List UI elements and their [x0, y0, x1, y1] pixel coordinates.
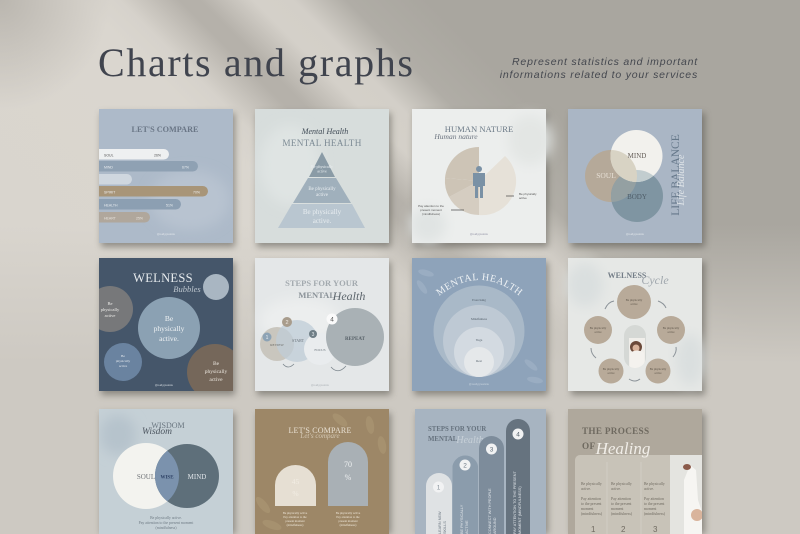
heading [582, 426, 649, 451]
column 2: moment [611, 507, 624, 511]
bar: mind: MIND [104, 166, 113, 170]
badge 2: 2 [285, 320, 289, 326]
badge 4: 4 [330, 316, 334, 324]
cycle circle: left [584, 316, 612, 344]
column 2: (mindfulness) [611, 512, 633, 516]
heading: HUMAN NATURE [445, 124, 513, 134]
panel: let's compare arches: Let's compare [299, 432, 340, 440]
panel: life balance venn [568, 109, 702, 243]
panel: mental health pyramid [255, 109, 389, 243]
circle: level 2 [443, 305, 515, 377]
script title: Human nature [433, 132, 478, 141]
panel: mental health pyramid: active [317, 168, 327, 174]
circle: level 1 [434, 286, 524, 376]
panel: welness cycle: Cycle [641, 273, 669, 287]
column 2: Be physically [611, 482, 632, 486]
panel: steps for your mental health circles [255, 258, 389, 391]
panel: let's compare bars [99, 109, 233, 243]
panel: welness bubbles: Bubbles [173, 284, 201, 294]
panel: welness cycle [567, 258, 704, 391]
pill 2 [452, 456, 478, 534]
bubble: center: physically [154, 324, 185, 333]
column 1: Pay attention [581, 497, 601, 501]
panel: mental health pyramid: Be physically [308, 187, 336, 192]
column 1: (mindfulness) [581, 512, 603, 516]
cycle circle: lower right [646, 358, 670, 384]
pill 2: 2 [463, 462, 467, 470]
bar: blue [99, 199, 181, 210]
arch photo [624, 325, 646, 368]
panel: life balance venn: BODY [627, 193, 647, 201]
column 3: moment [644, 507, 657, 511]
column 2: active. [611, 487, 621, 491]
pill 1: SKILLS [443, 521, 447, 534]
leaf decoration [254, 411, 388, 532]
panel: wisdom venn: WISE [160, 476, 174, 480]
bubble: center: active. [159, 334, 179, 343]
column 3 [644, 482, 666, 534]
bar: brown: 70% [193, 190, 200, 194]
pill 3: CONNECT WITH PEOPLE [488, 488, 492, 534]
heading: STEPS FOR YOUR [428, 426, 486, 433]
column 1: to the present [581, 502, 602, 506]
circle: body [611, 170, 663, 222]
arch: 70 percent: 70 [344, 460, 352, 469]
bubble: left: physically [101, 307, 120, 312]
panel: wisdom venn: MIND [188, 473, 206, 481]
heading: LET'S COMPARE [132, 125, 199, 134]
caption: Be physically active. [150, 516, 182, 520]
pill 3: AROUND [493, 517, 497, 534]
icon: person [473, 166, 485, 198]
panel: mental health nested circles [412, 258, 546, 391]
panel: life balance venn: @reallygreatsite [626, 233, 645, 236]
bar: blue: HEALTH [104, 204, 118, 208]
callout left: present moment [420, 208, 442, 212]
column 3: 3 [653, 525, 658, 534]
bar: blue: 51% [166, 204, 173, 208]
arch: 70 percent [328, 442, 368, 506]
column 1: moment [581, 507, 594, 511]
panel: life balance venn: SOUL [596, 171, 616, 180]
panel: welness bubbles: @reallygreatsite [155, 384, 174, 387]
bar: light [99, 174, 132, 184]
panel: steps for your mental health circles: @reallygreatsite [311, 384, 330, 387]
subtitle: Represent statistics and important [512, 56, 698, 68]
pill 2: ACTIVE [465, 520, 469, 534]
column 1: active. [581, 487, 591, 491]
panel: mental health pyramid: active. [313, 217, 331, 225]
caption: (mindfulness) [155, 526, 177, 530]
panel: life balance venn: Life Balance [676, 154, 687, 206]
cycle circle: lower left: Be physically [603, 367, 619, 371]
pill 3: 3 [490, 446, 494, 454]
callout left: (mindfulness) [422, 212, 440, 216]
column 2: to the present [611, 502, 632, 506]
pill 4 [506, 419, 530, 534]
heading: MENTAL HEALTH [282, 138, 362, 148]
cycle circle: right: active [667, 330, 675, 334]
column 3: Be physically [644, 482, 665, 486]
heading: MENTAL [298, 290, 335, 300]
panel: human nature pie: @reallygreatsite [470, 233, 489, 236]
overlap: mind and body [636, 170, 653, 182]
script title: Mental Health [301, 127, 348, 136]
panel: wisdom venn [99, 409, 233, 534]
column 3: Pay attention [644, 497, 664, 501]
panel: mental health nested circles: Yoga [476, 338, 483, 342]
panel: human nature pie [410, 109, 552, 243]
callout left: Pay attention to the [418, 204, 444, 208]
card shadows [101, 113, 705, 534]
bar: tan: 25% [136, 216, 143, 220]
cycle circle: top: Be physically [626, 298, 642, 302]
bubble: left: active [105, 313, 115, 318]
column 3: (mindfulness) [644, 512, 666, 516]
pie chart [445, 147, 516, 215]
column 1: Be physically [581, 482, 602, 486]
pill 2: BE PHYSICALLY [460, 504, 464, 534]
caption left: (mindfulness) [287, 523, 303, 527]
side heading: LIFE BALANCE [670, 134, 682, 216]
bubble: left: Be [108, 301, 112, 306]
cycle circle: top [617, 285, 651, 319]
panel: let's compare bars: @reallygreatsite [157, 233, 176, 236]
bar: mind: 67% [182, 166, 189, 170]
caption right: present moment [338, 519, 358, 523]
panel: mental health pyramid: Be physically [303, 208, 341, 216]
column 3: to the present [644, 502, 665, 506]
heading: OF [582, 441, 595, 451]
circle: repeat: REPEAT [345, 337, 366, 342]
arch: 70 percent: % [345, 473, 352, 482]
callout right: Be physically [519, 192, 537, 196]
bar: mind [99, 161, 198, 172]
bubble: bottom left [104, 343, 142, 381]
bar: soul: SOUL [104, 154, 114, 158]
leaf decoration [415, 268, 543, 384]
heading [285, 278, 359, 300]
circle: level 4 [464, 347, 494, 377]
heading: THE PROCESS [582, 426, 649, 436]
bar: brown: SPIRIT [104, 190, 116, 194]
arrows [283, 364, 346, 371]
callout right [506, 192, 537, 200]
bubble: center [138, 297, 200, 359]
cycle circle: right [657, 316, 685, 344]
pyramid top [309, 152, 335, 177]
bubble: bottom left: Be [121, 354, 125, 358]
bubble: bottom left: physically [116, 359, 130, 363]
badge 1: 1 [266, 335, 269, 341]
overlap: soul and body [611, 176, 636, 202]
circle: soul [585, 150, 637, 202]
circle: mind [155, 444, 219, 508]
caption left: Pay attention to the [283, 515, 307, 519]
panel: steps pills: Health [455, 435, 484, 446]
circle: start: START [292, 338, 305, 343]
arch: 45 percent: % [292, 489, 299, 498]
bubble: bottom left: active [119, 364, 128, 368]
bubble: bottom right: Be [213, 361, 219, 367]
cycle circle: left: Be physically [590, 326, 606, 330]
cycle circle: left: active [594, 330, 602, 334]
pill 1 [426, 473, 452, 534]
arc heading: MENTAL HEALTH [436, 273, 523, 296]
bubble: bottom right [187, 344, 233, 391]
content panel [575, 455, 670, 534]
bubble: left [99, 286, 133, 332]
callout left [418, 204, 464, 216]
column 2: 2 [621, 525, 626, 534]
heading: WISDOM [151, 421, 185, 430]
panel: wisdom venn: SOUL [137, 473, 155, 481]
cycle circle: lower right: active [654, 371, 662, 375]
bar: tan [99, 212, 150, 222]
title: Charts and graphs [98, 40, 413, 85]
panel: mental health nested circles: Exercising [472, 298, 486, 302]
caption right: Pay attention to the [336, 515, 360, 519]
overlap: mind and soul [610, 150, 637, 182]
arrows [591, 301, 676, 381]
arch: 45 percent [275, 465, 316, 506]
bubble: top right [203, 274, 229, 300]
circle: focus: FOCUS [314, 348, 326, 352]
panel: let's compare arches [254, 409, 389, 534]
cycle circle: lower left: active [607, 371, 615, 375]
caption left: present moment [285, 519, 305, 523]
bar: tan: HEART [104, 216, 117, 220]
column 2 [611, 482, 633, 534]
heading: WELNESS [133, 271, 193, 285]
panel: life balance venn: MIND [628, 152, 646, 160]
callout right: active [519, 196, 527, 200]
caption right: (mindfulness) [340, 523, 356, 527]
script title: Health [332, 289, 365, 303]
heading: WELNESS [608, 271, 647, 280]
cycle circle: lower right: Be physically [650, 367, 666, 371]
subtitle [500, 56, 698, 81]
circle: soul [113, 443, 168, 509]
panel: mental health nested circles: @reallygreatsite [469, 382, 490, 386]
caption right: Be physically active [336, 511, 360, 515]
cycle circle: right: Be physically [663, 326, 679, 330]
cycle circle: top: active [630, 302, 638, 306]
circle: review [260, 327, 294, 361]
panel: mental health nested circles: Mindfulness [471, 317, 488, 321]
panel: welness bubbles [99, 258, 233, 391]
pill 4: PAY ATTENTION TO THE PRESENT [513, 471, 517, 534]
caption: Pay attention to the present moment [139, 521, 194, 525]
panel: mental health nested circles: Rest [476, 359, 482, 363]
heading [428, 426, 486, 441]
overlap: wise [155, 450, 179, 501]
cycle circle: lower left [598, 358, 624, 384]
panel: wisdom venn: Wisdom [142, 427, 172, 437]
pill 4: 4 [516, 432, 520, 438]
heading: MENTAL [428, 436, 458, 443]
column 1 [581, 482, 603, 534]
pill 3 [479, 436, 504, 534]
panel: mental health pyramid: active [316, 193, 329, 198]
panel: the process of healing [568, 409, 703, 534]
panel: steps pills [415, 409, 546, 534]
photo [670, 455, 703, 534]
circle: mind [610, 130, 662, 182]
column 1: 1 [591, 525, 596, 534]
heading: STEPS FOR YOUR [285, 278, 359, 288]
pyramid base [278, 204, 365, 228]
arch: 45 percent: 45 [292, 477, 300, 486]
pill 1: LEARN NEW [438, 511, 442, 534]
column 3: active. [644, 487, 654, 491]
subtitle: informations related to your services [500, 69, 698, 81]
heading: LET'S COMPARE [288, 426, 352, 435]
panel: steps for your mental health circles: REVIEW [270, 343, 284, 347]
panel: mental health pyramid: Be physically [311, 164, 333, 169]
caption left: Be physically active [283, 511, 307, 515]
badge 3: 3 [312, 332, 315, 338]
pill 1: 1 [437, 484, 441, 492]
pyramid middle [293, 178, 351, 203]
circle: level 3 [454, 327, 504, 377]
bubble: center: Be [165, 314, 173, 323]
bubble: bottom right: active [209, 377, 223, 383]
bar: soul [99, 149, 169, 160]
bubble: bottom right: physically [205, 369, 228, 375]
pill 4: MOMENT (MINDFULNESS) [518, 486, 522, 534]
script title: Healing [595, 439, 650, 458]
column 2: Pay attention [611, 497, 631, 501]
bar: soul: 26% [154, 154, 161, 158]
bar: brown [99, 186, 208, 196]
